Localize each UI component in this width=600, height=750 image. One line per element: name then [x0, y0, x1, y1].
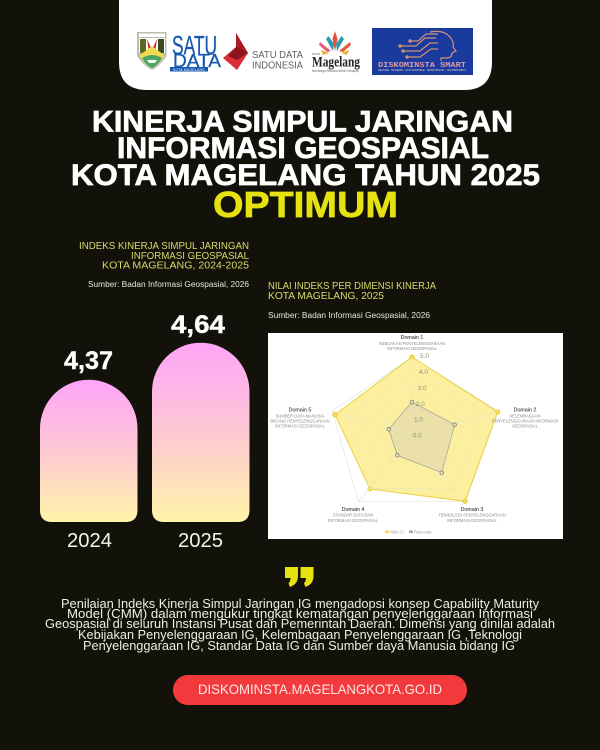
- radar series: Nilai SJ: [333, 355, 500, 503]
- radar scale labels: 2.0: [416, 401, 425, 408]
- radar scale labels: 5.0: [420, 353, 429, 360]
- radar axis labels: TEKNOLOGI PENYELENGGARAAN: [438, 513, 506, 518]
- title: KOTA MAGELANG TAHUN 2025: [71, 159, 540, 192]
- right chart source: Sumber: Badan Informasi Geospasial, 2026: [268, 311, 431, 320]
- logo: Diskominsta Smart: SECURE · MODERN · ACCOUNTABLE · RESPONSIVE · TRANSPARENT: [378, 68, 466, 72]
- logo: Kota Magelang brand: Magelang: [312, 54, 361, 70]
- radar axis labels: KEBIJAKAN PENYELENGGARAAN: [379, 341, 445, 346]
- radar axis labels: INFORMASI GEOSPASIAL: [275, 424, 326, 429]
- radar axis labels: Domain 4: [342, 507, 364, 513]
- right chart heading: KOTA MAGELANG, 2025: [268, 290, 384, 302]
- logo: Satu Data Indonesia: INDONESIA: [252, 60, 303, 72]
- description text: Penilaian Indeks Kinerja Simpul Jaringan IG mengadopsi konsep Capability Maturity: [61, 597, 540, 611]
- left chart source: Sumber: Badan Informasi Geospasial, 2026: [88, 280, 250, 289]
- radar series: Rata-rata: [387, 400, 457, 475]
- bar 2024: 2024: [67, 530, 112, 552]
- radar axis labels: INFORMASI GEOSPASIAL: [447, 518, 498, 523]
- radar legend: Nilai SJ: [390, 529, 404, 534]
- logo: Satu Data Indonesia: SATU DATA: [252, 49, 303, 61]
- bar 2024: 4,37: [64, 347, 113, 375]
- left chart heading: INFORMASI GEOSPASIAL: [131, 250, 249, 262]
- right chart heading: [268, 280, 436, 302]
- logo: Kota Magelang brand: Membangun Bersama Meraih Kemajuan: [312, 69, 359, 73]
- logo: Satu Data Kota Magelang: [170, 30, 221, 72]
- description text: [45, 597, 555, 653]
- left chart heading: [79, 240, 249, 272]
- radar axis labels: PENYELENGGARAAN INFORMASI: [492, 419, 558, 424]
- description text: Model (CMM) dalam mengukur tingkat kematangan penyelenggaraan Informasi: [67, 607, 533, 621]
- logo: Diskominsta Smart: [372, 28, 473, 75]
- bar 2025: 4,64: [171, 311, 225, 339]
- radar scale labels: 3.0: [418, 385, 427, 392]
- left chart heading: INDEKS KINERJA SIMPUL JARINGAN: [79, 240, 249, 252]
- description text: Kebijakan Penyelenggaraan IG, Kelembagaan Penyelenggaraan IG ,Teknologi: [78, 628, 522, 642]
- website button: DISKOMINSTA.MAGELANGKOTA.GO.ID: [198, 681, 442, 697]
- icon: quotation mark: [285, 567, 314, 587]
- bar chart: index 2024-2025: [40, 311, 250, 552]
- radar axis labels: SUMBER DAYA MANUSIA: [276, 414, 325, 419]
- header logo panel: [119, 0, 492, 90]
- radar axis labels: BIDANG PENYELENGGARAAN: [270, 419, 330, 424]
- logo: Satu Data Kota Magelang: SATU: [172, 30, 217, 60]
- radar axis labels: GEOSPASIAL: [512, 424, 539, 429]
- radar legend: Rata-rata: [414, 529, 432, 534]
- logo: Kota Magelang brand: [312, 31, 361, 73]
- radar chart panel: [268, 333, 563, 539]
- radar axis labels: Domain 1: [401, 335, 423, 341]
- radar legend: [385, 529, 432, 534]
- radar axis labels: KELEMBAGAAN: [510, 414, 541, 419]
- radar axis labels: Domain 3: [461, 507, 483, 513]
- title: KINERJA SIMPUL JARINGAN: [92, 106, 513, 138]
- bar 2025: [152, 311, 250, 552]
- logo: Satu Data Kota Magelang: KOTA MAGELANG: [173, 67, 205, 72]
- radar axis labels: Domain 5: [289, 408, 311, 414]
- radar axis labels: [270, 335, 558, 523]
- website button: [173, 675, 467, 705]
- left chart heading: KOTA MAGELANG, 2024-2025: [102, 260, 249, 272]
- radar axis labels: Domain 2: [514, 408, 536, 414]
- logo: Diskominsta Smart: DISKOMINSTA SMART: [378, 62, 466, 70]
- bar 2024: [40, 347, 138, 552]
- radar scale labels: 0.0: [413, 432, 422, 439]
- radar axis labels: STANDAR DATA DAN: [333, 513, 373, 518]
- radar axis labels: INFORMASI GEOSPASIAL: [387, 346, 438, 351]
- description text: Geospasial di seluruh Instansi Pusat dan Pemerintah Daerah. Dimensi yang dinilai adalah: [45, 617, 555, 631]
- radar scale labels: [413, 353, 429, 439]
- right chart heading: NILAI INDEKS PER DIMENSI KINERJA: [268, 280, 436, 292]
- title: [71, 106, 540, 192]
- radar scale labels: 4.0: [419, 369, 428, 376]
- logo: Kota Magelang shield: [137, 32, 166, 70]
- description text: Penyelenggaraan IG, Standar Data IG dan Sumber daya Manusia bidang IG: [83, 639, 515, 653]
- logo: Satu Data Kota Magelang: DATA: [173, 51, 221, 71]
- title: INFORMASI GEOSPASIAL: [117, 132, 489, 165]
- radar axis labels: INFORMASI GEOSPASIAL: [328, 518, 379, 523]
- highlight word: optimum: OPTIMUM: [213, 184, 398, 225]
- logo: Satu Data Indonesia: [223, 33, 303, 72]
- bar 2025: 2025: [178, 530, 223, 552]
- radar scale labels: 1.0: [414, 417, 423, 424]
- logo: Kota Magelang brand: KOTA: [312, 52, 320, 56]
